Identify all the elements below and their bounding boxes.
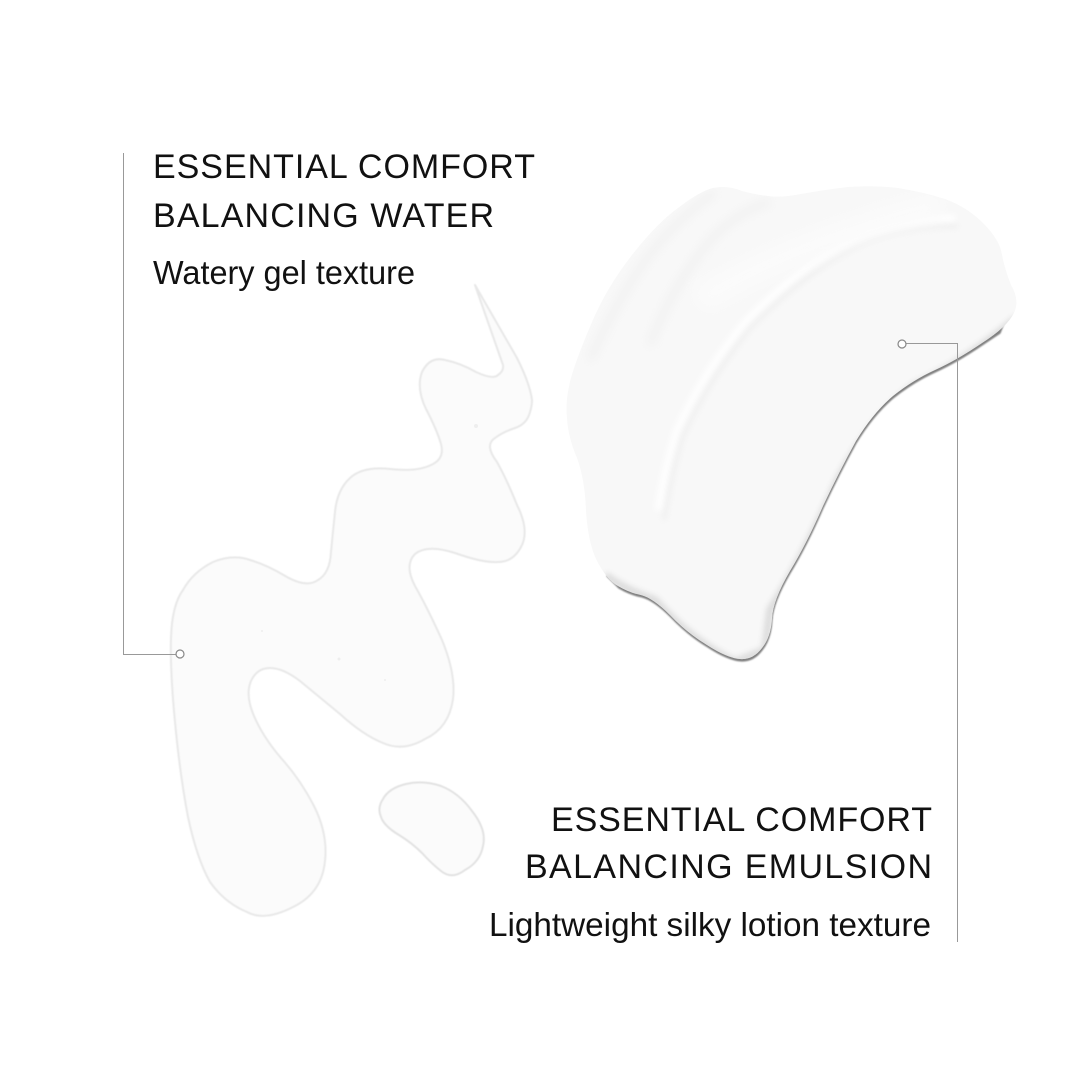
text block: water: BALANCING WATER (153, 197, 494, 235)
text block: water: ESSENTIAL COMFORT (153, 148, 535, 186)
text block: emulsion: BALANCING EMULSION (525, 848, 932, 886)
text block: water (153, 148, 535, 291)
main gel stream (171, 285, 532, 916)
text block: emulsion (489, 801, 932, 943)
text block: emulsion: Lightweight silky lotion texture (489, 906, 931, 943)
text block: emulsion: ESSENTIAL COMFORT (551, 801, 932, 839)
cream fold ridges (590, 192, 715, 360)
gel droplet (379, 782, 484, 875)
gel swatch: water texture (171, 285, 532, 916)
cream underside shading (605, 318, 1017, 662)
callout: water (124, 153, 184, 658)
infographic canvas (123, 153, 1014, 943)
callout: emulsion (898, 340, 958, 942)
gel bubbles (261, 424, 478, 681)
text block: water: Watery gel texture (153, 254, 415, 291)
cream swatch: emulsion texture (566, 186, 1017, 662)
